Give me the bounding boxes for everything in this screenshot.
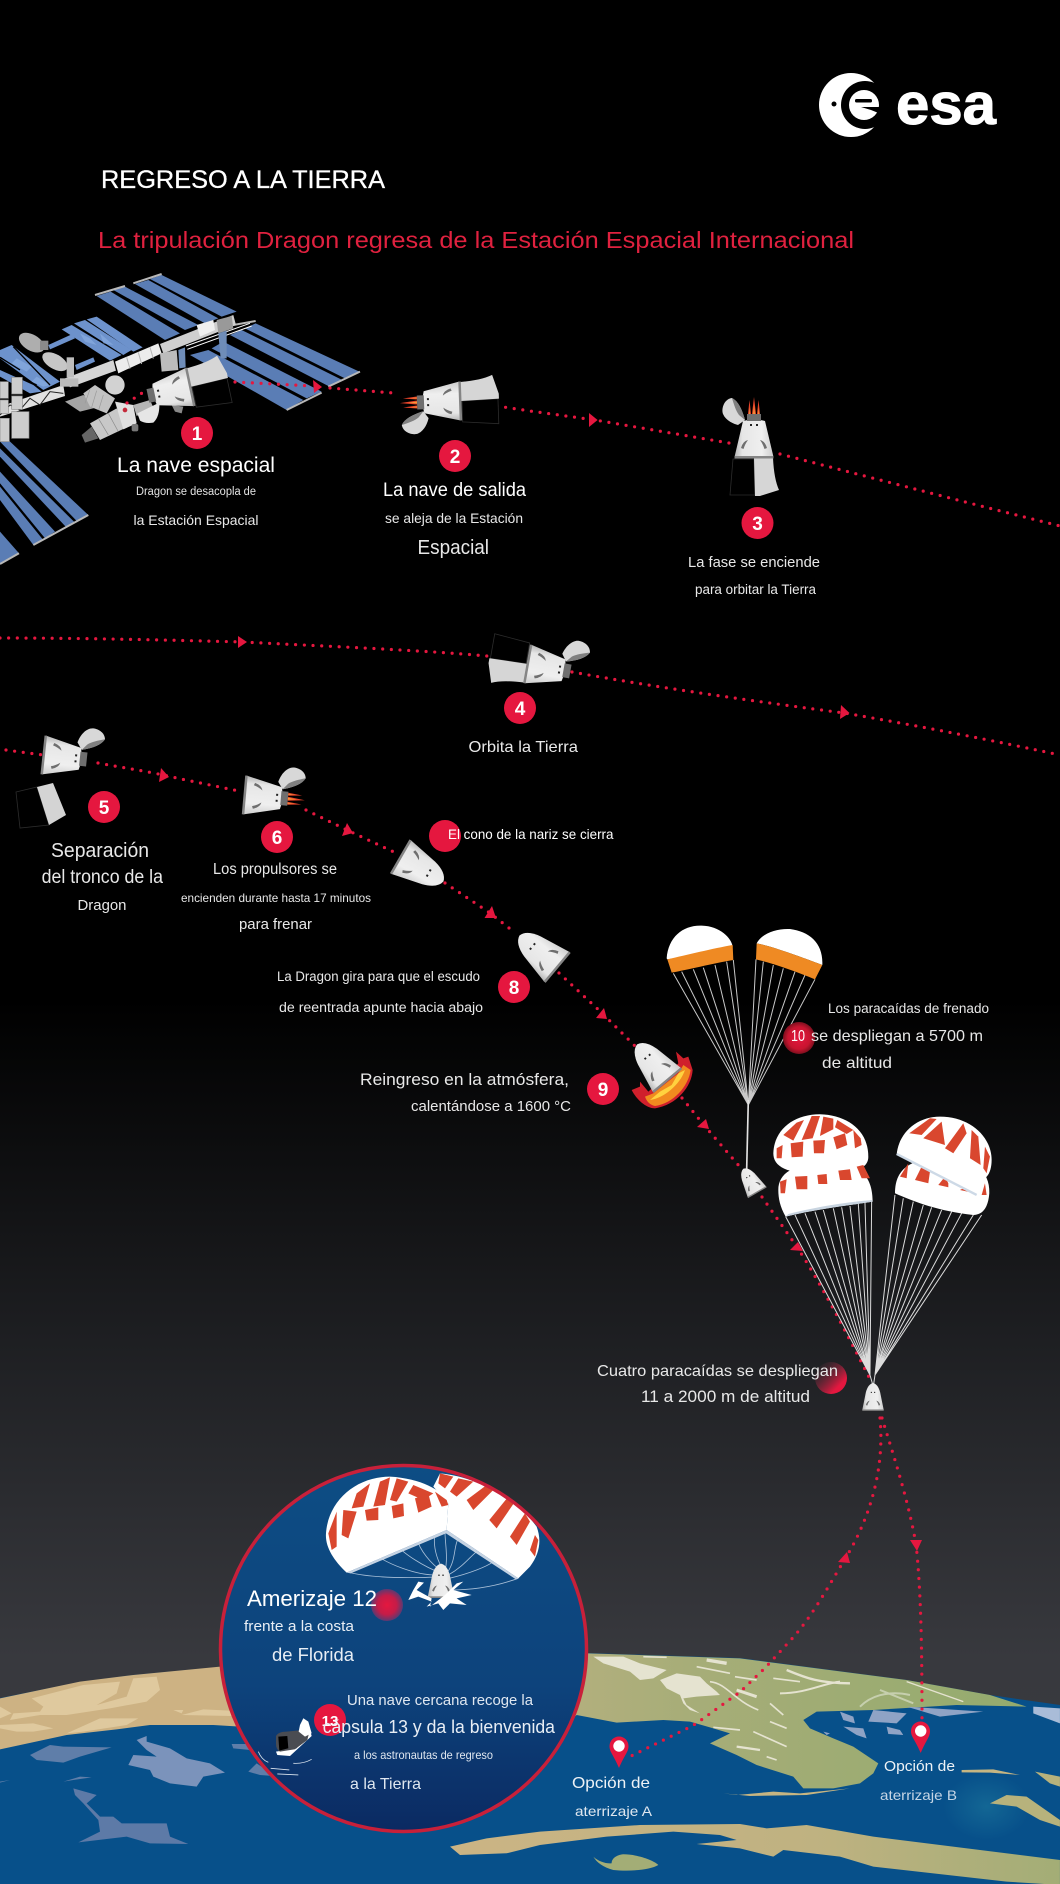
text: step 9 [360, 1070, 571, 1115]
text: step 11: 11 a 2000 m de altitud [641, 1387, 810, 1406]
text: step 10: se despliegan a 5700 m [811, 1028, 983, 1045]
text: step 5: Dragon [78, 897, 126, 914]
text: landing option A: Opción de [572, 1775, 650, 1792]
title: REGRESO A LA TIERRA [101, 166, 385, 194]
text: step 1: La nave espacial [117, 454, 275, 477]
modules [16, 329, 48, 357]
text: step 6: encienden durante hasta 17 minutos [181, 891, 371, 905]
badge 9 [587, 1073, 619, 1105]
main parachutes [773, 1114, 992, 1387]
text: step 1 [117, 454, 275, 528]
text: landing option B: aterrizaje B [880, 1787, 957, 1803]
badge 13 [314, 1704, 346, 1736]
text: step 10: Los paracaídas de frenado [828, 1001, 989, 1016]
badge 6 [261, 821, 293, 853]
recovery ship [258, 1718, 312, 1775]
badge 1 [181, 417, 213, 449]
logo: esa: esa [896, 72, 997, 137]
badge 5: 5 [99, 798, 110, 819]
text: step 10 [791, 1001, 989, 1072]
text: step 1: la Estación Espacial [134, 512, 258, 528]
badge 13: 13 [322, 1713, 338, 1730]
text: step 12: de Florida [272, 1645, 355, 1665]
text: step 2 [383, 480, 526, 559]
illustration: International Space Station [0, 274, 360, 564]
text: step 2: se aleja de la Estación [385, 510, 523, 526]
text: step 10: 10 [791, 1028, 805, 1045]
text: step 11: Cuatro paracaídas se despliegan [597, 1363, 838, 1380]
text: step 9: Reingreso en la atmósfera, [360, 1070, 569, 1089]
text: step 5 [42, 840, 163, 914]
text: step 8: La Dragon gira para que el escudo [277, 969, 480, 984]
text: step 3 [688, 554, 820, 597]
logo: esa [819, 72, 997, 137]
eastern land and islands [450, 1653, 1060, 1884]
text: step 3: para orbitar la Tierra [695, 582, 816, 597]
capsule 5: trunk separation [16, 723, 106, 828]
text: step 5: del tronco de la [42, 867, 163, 888]
dotted descent paths to the landing options [627, 1418, 922, 1758]
badge 8 [498, 971, 530, 1003]
badge 5 [88, 791, 120, 823]
capsule 2: departing Dragon [399, 375, 500, 435]
badge 6: 6 [272, 828, 282, 849]
badge 4: 4 [515, 699, 526, 720]
text: step 11 [597, 1363, 838, 1406]
text: landing option A: aterrizaje A [575, 1803, 653, 1819]
inset capsule [428, 1564, 454, 1598]
text: step 4: Orbita la Tierra [468, 739, 578, 756]
main parachute lines [786, 1195, 982, 1387]
text: step 12 [244, 1586, 377, 1665]
capsule 11: under main chutes [862, 1383, 884, 1411]
text: step 13: a la Tierra [350, 1776, 421, 1793]
text: step 2: La nave de salida [383, 480, 526, 501]
capsule 7: nose cone closed [390, 839, 453, 898]
text: step 8: de reentrada apunte hacia abajo [279, 1000, 483, 1015]
red dotted trajectory paths [0, 382, 1060, 1383]
badge 11 [815, 1362, 847, 1394]
landing option markers [610, 1722, 930, 1768]
text: step 13: cápsula 13 y da la bienvenida [323, 1717, 556, 1737]
text: landing option B [880, 1758, 957, 1803]
text: step 13: a los astronautas de regreso [354, 1748, 493, 1762]
text: step 2: Espacial [418, 537, 489, 559]
text: step 6: Los propulsores se [213, 861, 337, 878]
text: step 1: Dragon se desacopla de [136, 486, 256, 498]
drogue parachutes [667, 926, 822, 1170]
text: step 13: Una nave cercana recoge la [347, 1692, 534, 1709]
text: step 5: Separación [51, 840, 149, 862]
capsule 10: under drogue chutes [734, 1163, 767, 1198]
text: step 6: para frenar [239, 916, 312, 933]
subtitle: La tripulación Dragon regresa de la Estación Espacial Internacional [98, 227, 854, 253]
text: step 12: frente a la costa [244, 1618, 355, 1635]
text: step 13 [323, 1692, 556, 1793]
splash [408, 1582, 472, 1610]
marker A [610, 1736, 628, 1768]
badge 10 [783, 1022, 815, 1054]
text: step 6 [181, 861, 371, 933]
capsule 4: orbiting Earth [485, 626, 592, 699]
number badges [88, 417, 847, 1736]
badge 3 [742, 507, 774, 539]
solar arrays [0, 275, 359, 564]
badge 1: 1 [192, 424, 203, 445]
badge 7 [429, 820, 461, 852]
inset parachute lines [350, 1532, 518, 1590]
capsule 8: Dragon rotates [507, 921, 571, 983]
badge 2: 2 [450, 447, 460, 468]
text: step 10: de altitud [822, 1055, 892, 1072]
text: landing option B: Opción de [884, 1758, 955, 1775]
radiator stacks [0, 377, 29, 442]
truss [0, 385, 65, 417]
text: step 9: calentándose a 1600 °C [411, 1098, 571, 1115]
text: landing option A [572, 1775, 653, 1819]
capsule 3: phase burn [722, 397, 779, 496]
badge 12 [371, 1589, 403, 1621]
drogue parachute lines [673, 959, 815, 1105]
western land and lakes [0, 1666, 273, 1844]
badge 3: 3 [752, 514, 763, 535]
capsule 9: atmospheric re-entry with flames [623, 1032, 693, 1108]
text: step 3: La fase se enciende [688, 554, 820, 571]
Earth [0, 1651, 1060, 1884]
badge 2 [439, 440, 471, 472]
capsule 1: docked Dragon [143, 354, 233, 419]
trajectory arrows [159, 380, 850, 1251]
marker B [911, 1722, 930, 1753]
badge 8: 8 [509, 978, 519, 999]
badge 4 [504, 692, 536, 724]
text: step 8 [277, 969, 483, 1015]
circular inset: splashdown [220, 1466, 586, 1832]
text: step 12: Amerizaje 12 [247, 1586, 377, 1611]
text: step 7: El cono de la nariz se cierra [448, 826, 614, 842]
capsule 6: thrusters braking [242, 763, 308, 820]
badge 9: 9 [598, 1080, 608, 1101]
